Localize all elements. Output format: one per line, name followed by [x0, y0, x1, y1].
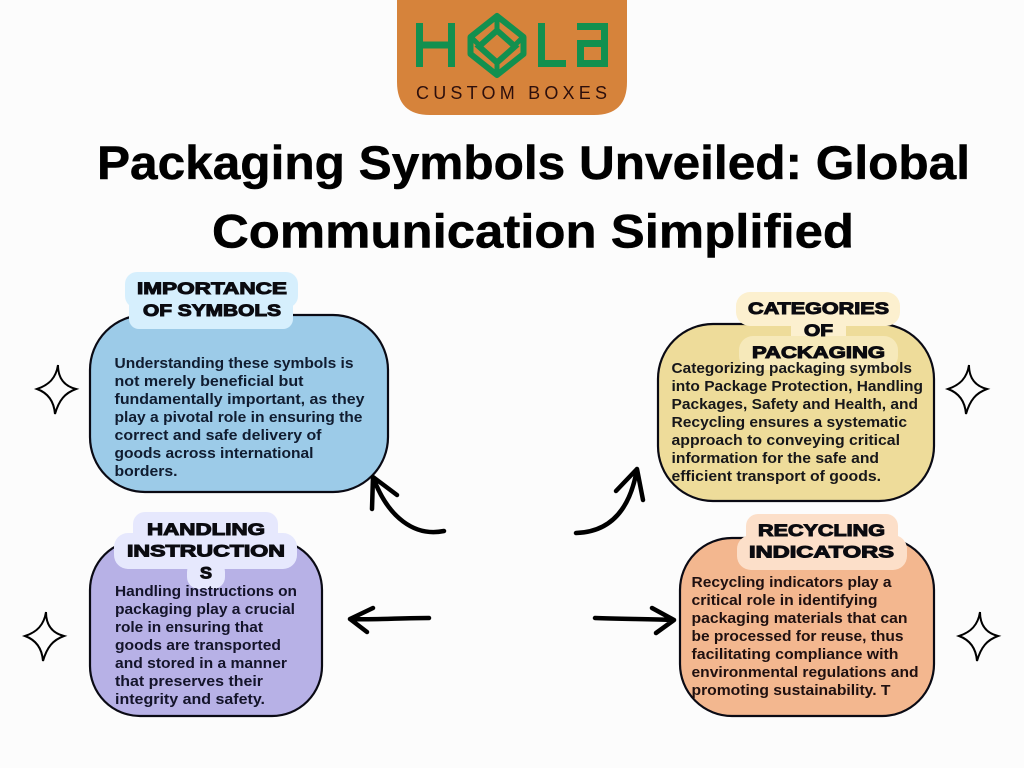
- heading: handling instructions: INSTRUCTION: [127, 542, 285, 560]
- heading: handling instructions: HANDLING: [147, 521, 265, 539]
- text block: importance body: borders.: [114, 463, 178, 480]
- panel: categories of packaging: [658, 292, 934, 501]
- title: Communication Simplified: [212, 206, 854, 258]
- panel: importance of symbols: [90, 272, 388, 492]
- text block: importance body: correct and safe delivery of: [114, 427, 323, 444]
- heading: importance of symbols: IMPORTANCE: [137, 280, 287, 298]
- icon: sparkle left top: [37, 365, 76, 414]
- text block: recycling body: critical role in identifying: [692, 592, 878, 609]
- heading: recycling indicators: INDICATORS: [749, 544, 894, 562]
- text block: importance body: [114, 355, 365, 480]
- arrow: to recycling indicators: [595, 608, 674, 633]
- text block: recycling body: environmental regulations and: [692, 664, 918, 681]
- text block: recycling body: packaging materials that can: [692, 610, 908, 627]
- arrow: to handling instructions: [350, 608, 429, 632]
- text block: importance body: Understanding these symbols is: [114, 355, 354, 372]
- icon: sparkle right bottom: [959, 612, 998, 661]
- text block: recycling body: Recycling indicators play a: [692, 574, 892, 591]
- text block: handling body: that preserves their: [115, 673, 263, 690]
- heading: recycling indicators: [737, 514, 907, 570]
- title: [97, 137, 970, 258]
- text block: categories body: approach to conveying critical: [672, 432, 900, 449]
- text block: recycling body: facilitating compliance with: [692, 646, 898, 663]
- panel: handling instructions: [90, 512, 322, 716]
- text block: categories body: Recycling ensures a systematic: [672, 414, 907, 431]
- heading: handling instructions: S: [200, 564, 212, 582]
- text block: handling body: role in ensuring that: [115, 619, 263, 636]
- text block: handling body: Handling instructions on: [115, 583, 297, 600]
- text block: categories body: into Package Protection, Handling: [672, 378, 923, 395]
- arrow: to categories of packaging: [576, 469, 643, 533]
- text block: importance body: not merely beneficial but: [114, 373, 304, 390]
- text block: categories body: information for the safe and: [672, 450, 879, 467]
- text block: importance body: fundamentally important, as they: [114, 391, 365, 408]
- title: Packaging Symbols Unveiled: Global: [97, 137, 970, 190]
- text block: handling body: packaging play a crucial: [115, 601, 295, 618]
- text block: categories body: Categorizing packaging symbols: [672, 360, 912, 377]
- heading: categories of packaging: OF: [804, 322, 833, 340]
- text block: handling body: [115, 583, 297, 708]
- icon: sparkle right top: [948, 365, 987, 414]
- heading: recycling indicators: RECYCLING: [758, 522, 885, 540]
- arrow: to importance of symbols: [372, 477, 444, 532]
- panel: recycling indicators: [680, 514, 934, 716]
- heading: handling instructions: [114, 512, 297, 589]
- logo: Hola Custom Boxes: [397, 0, 627, 115]
- logo: Hola Custom Boxes: CUSTOM BOXES: [416, 83, 607, 103]
- heading: importance of symbols: [125, 272, 298, 329]
- text block: categories body: efficient transport of goods.: [672, 468, 881, 485]
- text block: importance body: play a pivotal role in ensuring the: [114, 409, 362, 426]
- text block: categories body: [672, 360, 923, 485]
- text block: handling body: goods are transported: [115, 637, 281, 654]
- text block: handling body: and stored in a manner: [115, 655, 287, 672]
- text block: handling body: integrity and safety.: [115, 691, 265, 708]
- text block: recycling body: be processed for reuse, thus: [692, 628, 904, 645]
- text block: recycling body: [692, 574, 918, 699]
- text block: categories body: Packages, Safety and Health, and: [672, 396, 918, 413]
- text block: importance body: goods across international: [114, 445, 314, 462]
- heading: categories of packaging: CATEGORIES: [748, 300, 889, 318]
- heading: importance of symbols: OF SYMBOLS: [143, 302, 281, 320]
- heading: categories of packaging: [736, 292, 900, 370]
- text block: recycling body: promoting sustainability. T: [692, 682, 890, 699]
- icon: sparkle left bottom: [25, 612, 64, 661]
- heading: categories of packaging: PACKAGING: [752, 344, 885, 362]
